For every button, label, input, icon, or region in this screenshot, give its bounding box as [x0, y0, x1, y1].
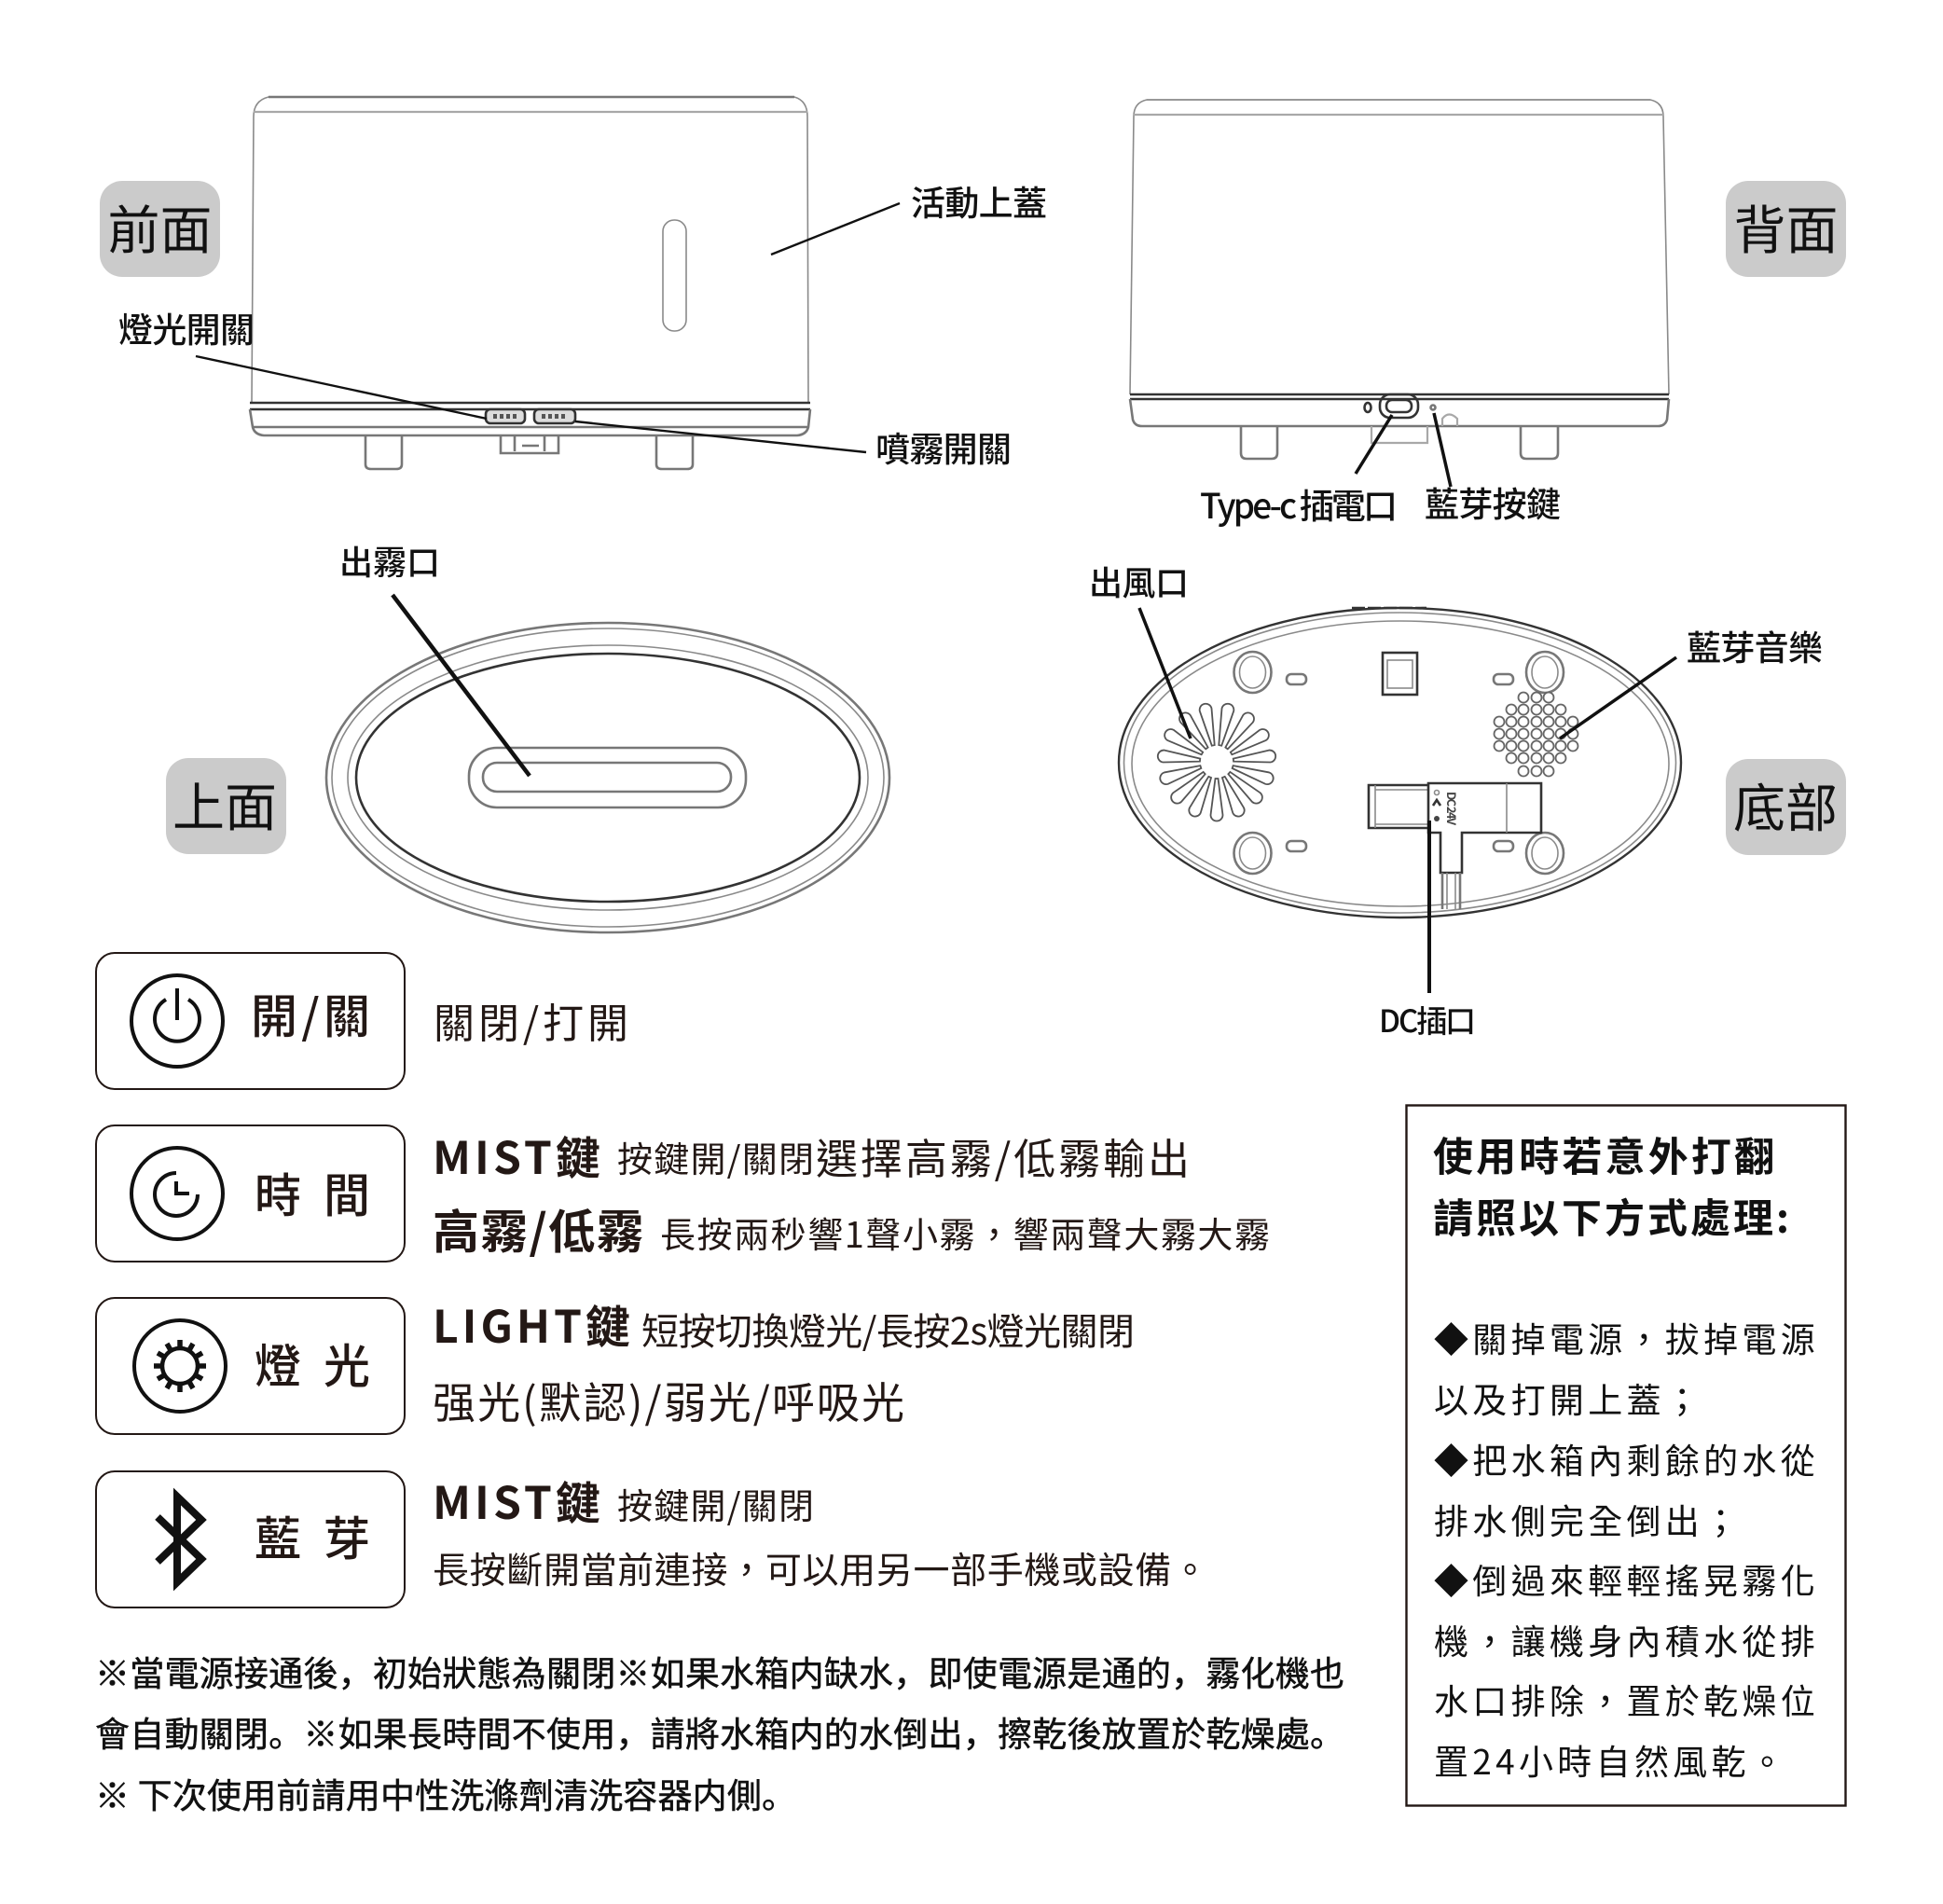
badge: front: 前面: [108, 189, 213, 265]
label: air outlet: 出風口: [1089, 557, 1189, 605]
panel body: ◆關掉電源，拔掉電源: [1434, 1312, 1819, 1362]
label: lid: 活動上蓋: [911, 175, 1047, 226]
notes: [95, 1646, 1344, 1818]
panel body: ◆把水箱內剩餘的水從: [1434, 1433, 1819, 1483]
badge: back: 背面: [1734, 189, 1839, 265]
description: mist key: 選擇高霧/低霧輸出: [816, 1125, 1190, 1186]
DC socket bracket: DC 24V: [1443, 792, 1461, 826]
label: mist switch: [575, 421, 1012, 472]
panel: overturn instructions: [1406, 1106, 1846, 1805]
label: Bluetooth button: 藍芽按鍵: [1425, 476, 1561, 527]
notes: ※當電源接通後，初始狀態為關閉※如果水箱内缺水，即使電源是通的，霧化機也: [95, 1646, 1344, 1696]
label: mist outlet: 出霧口: [339, 536, 440, 585]
label: Bluetooth music: [1560, 620, 1823, 738]
label: mist switch: 噴霧開關: [875, 421, 1012, 472]
description: mist key: MIST鍵: [433, 1122, 600, 1187]
label: mist outlet: [339, 536, 530, 776]
description: bluetooth: [433, 1467, 1208, 1594]
description: bluetooth: 按鍵開/關閉: [617, 1478, 814, 1529]
label: light switch: 燈光開關: [118, 302, 255, 352]
description: mist key: 按鍵開/關閉: [617, 1131, 814, 1182]
button: light: [96, 1298, 405, 1434]
button: timer: 時 間: [255, 1159, 370, 1226]
badge: top: 上面: [172, 766, 277, 842]
description: mist key: [433, 1122, 1270, 1262]
button: light: 燈 光: [255, 1330, 370, 1397]
panel body: 排水側完全倒出；: [1434, 1494, 1742, 1544]
diagram: top view: [326, 623, 889, 932]
description: light key: LIGHT鍵: [433, 1290, 630, 1356]
button: timer: [96, 1125, 405, 1262]
notes: ※ 下次使用前請用中性洗滌劑清洗容器内側。: [95, 1768, 796, 1818]
description: bluetooth: 長按斷開當前連接，可以用另一部手機或設備。: [433, 1542, 1208, 1594]
description: light key: [433, 1290, 1135, 1431]
badge: front: [100, 181, 220, 277]
panel body: 置24小時自然風乾。: [1434, 1734, 1788, 1785]
badge: back: [1726, 181, 1846, 277]
fan vent: [1157, 703, 1276, 821]
description: mist key: 高霧/低霧: [433, 1195, 643, 1262]
panel body: [1434, 1312, 1819, 1785]
description: mist key: 長按兩秒響1聲小霧，響兩聲大霧大霧: [660, 1207, 1270, 1258]
DC socket bracket: [1369, 783, 1541, 909]
panel heading: 請照以下方式處理:: [1433, 1187, 1789, 1245]
speaker grille: [1494, 692, 1578, 776]
label: Bluetooth button: [1425, 413, 1561, 527]
panel body: ◆倒過來輕輕搖晃霧化: [1434, 1553, 1819, 1604]
label: Bluetooth music: 藍芽音樂: [1687, 620, 1823, 670]
label: Type-c port: Type-c 插電口: [1200, 478, 1398, 529]
description: power: 關閉/打開: [434, 990, 628, 1050]
description: bluetooth: MIST鍵: [433, 1467, 600, 1532]
label: light switch: [118, 302, 487, 419]
label: air outlet: [1089, 557, 1191, 738]
panel body: 機，讓機身內積水從排: [1434, 1614, 1819, 1664]
label: DC socket: DC插口: [1379, 997, 1476, 1042]
panel heading: 使用時若意外打翻: [1433, 1125, 1774, 1183]
label: lid: [771, 175, 1047, 255]
diagram: bottom view: [1119, 608, 1681, 918]
badge: bottom: 底部: [1733, 767, 1838, 843]
description: light key: 强光(默認)/弱光/呼吸光: [433, 1370, 904, 1431]
badge: top: [166, 758, 286, 854]
panel body: 以及打開上蓋；: [1434, 1373, 1703, 1423]
panel heading: [1433, 1125, 1789, 1245]
button: bluetooth: 藍 芽: [255, 1502, 370, 1569]
diagram: front view: [250, 97, 810, 469]
button: bluetooth: [96, 1471, 405, 1607]
badge: bottom: [1726, 759, 1846, 855]
panel body: 水口排除，置於乾燥位: [1434, 1674, 1819, 1724]
button: power: 開/關: [251, 980, 370, 1047]
description: light key: 短按切換燈光/長按2s燈光關閉: [641, 1302, 1135, 1356]
label: Type-c port: [1200, 415, 1398, 529]
notes: 會自動關閉。※如果長時間不使用，請將水箱内的水倒出，擦乾後放置於乾燥處。: [95, 1706, 1344, 1757]
diagram: back view: [1130, 100, 1669, 459]
button: power: [96, 953, 405, 1089]
